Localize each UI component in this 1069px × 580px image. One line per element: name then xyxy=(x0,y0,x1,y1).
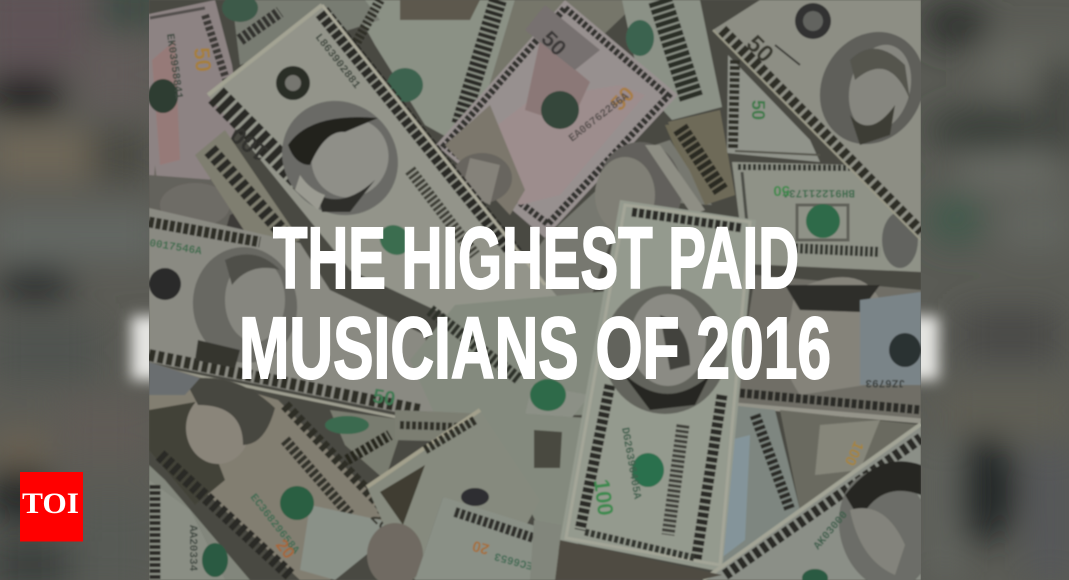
note: central Franklin hundred: 100 xyxy=(589,478,618,517)
note: bottom centre twenty xyxy=(415,497,580,580)
note: central pink fifty xyxy=(436,0,678,238)
note: bottom left corner note: AA20334 xyxy=(186,525,198,572)
note: Jackson twenty lower left: 20 xyxy=(367,507,395,535)
note: bottom left corner note xyxy=(149,465,250,580)
note: bottom centre twenty: OEC6653 xyxy=(493,549,541,573)
note: Jackson twenty lower left: EC36829658A xyxy=(247,492,301,557)
note: upper left pink fifty: 50 xyxy=(189,46,216,73)
panel: blurred right side xyxy=(905,0,1069,580)
note: lower right twenty stack xyxy=(722,406,916,564)
note: central pink fifty: EA06762286A xyxy=(567,91,632,145)
note: Grant fifty on the left: 0017546A xyxy=(148,238,203,258)
logo: TOI: TOI xyxy=(22,487,79,520)
note: bottom centre fold xyxy=(367,410,540,580)
note: Jackson twenty lower left: 20 xyxy=(272,536,298,562)
panel: blurred left side xyxy=(0,0,149,580)
note: shadow under central hundred xyxy=(530,520,722,580)
title line 2: MUSICIANS OF 2016 xyxy=(239,300,831,397)
note: central pink fifty: 50 xyxy=(607,83,639,115)
note: portrait note under pink fifty xyxy=(540,110,734,296)
note: top right fifty with Grant portrait: 50 xyxy=(741,30,779,68)
note: top centre teal twenty xyxy=(222,0,515,150)
note: hundred with Franklin portrait: 100 xyxy=(226,121,274,167)
logo: TOI xyxy=(20,472,83,542)
note: central pink fifty: 50 xyxy=(536,26,571,61)
note: upside-down Jackson note right: JZ6793 xyxy=(865,376,905,388)
note: upper left pink fifty xyxy=(149,0,236,180)
note: right middle with green seal: 50 xyxy=(773,182,790,199)
note: right middle with green seal xyxy=(732,162,921,272)
note: bottom right hundred with inverted portrait: AK03000 xyxy=(812,509,851,553)
note: Grant fifty on the left xyxy=(148,208,435,424)
note: lower right twenty stack: 100 xyxy=(841,438,867,468)
note: bottom centre twenty: 20 xyxy=(471,537,491,558)
note: hundred with Franklin portrait: L863902881 xyxy=(312,32,362,92)
note: right of top fifty xyxy=(727,55,820,162)
note: upside-down Jackson note right xyxy=(735,275,921,421)
note: middle strip notes xyxy=(325,410,585,540)
note: right of top fifty: 50 xyxy=(748,100,768,120)
note: top right fifty with Grant portrait xyxy=(713,0,944,240)
note: bottom right hundred with inverted portrait xyxy=(703,422,944,580)
panel: pile of banknotes photo xyxy=(145,0,944,580)
note: small note under hundred xyxy=(196,130,300,242)
note: Jackson twenty lower left xyxy=(149,362,403,580)
note: right middle with green seal: BH91221173A xyxy=(782,186,855,198)
note: Grant fifty on the left: 50 xyxy=(371,385,397,411)
note: central Franklin hundred xyxy=(560,200,756,572)
note: top fragment pair xyxy=(490,0,723,167)
title xyxy=(239,210,831,397)
note: upper left pink fifty: EK03958841 xyxy=(163,33,184,100)
note: central Franklin hundred: DG26396405A xyxy=(618,427,643,501)
note: portrait under pink fifty xyxy=(149,174,242,229)
title line 1: THE HIGHEST PAID xyxy=(273,210,799,307)
note: centre note behind the title xyxy=(425,290,604,418)
note: hundred with Franklin portrait xyxy=(208,5,560,350)
